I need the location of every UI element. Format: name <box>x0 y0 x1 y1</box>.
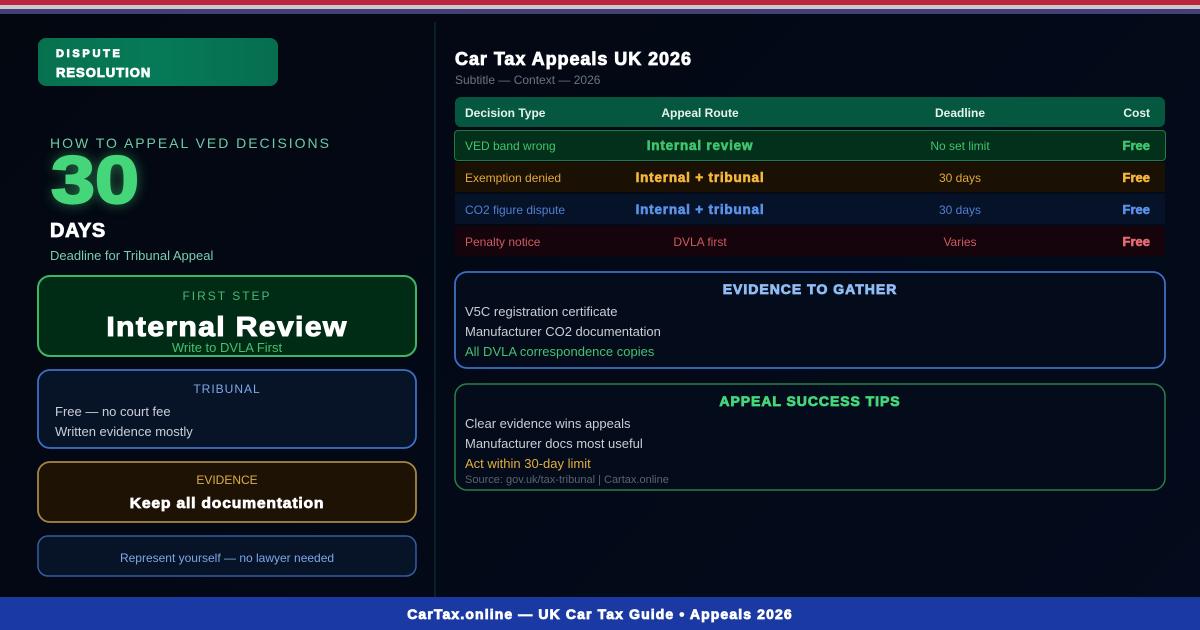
table header: Cost <box>1123 106 1150 120</box>
tips list: Act within 30-day limit <box>465 456 591 471</box>
tips list: Clear evidence wins appeals <box>465 416 630 431</box>
tribunal points: Written evidence mostly <box>55 424 193 439</box>
table header <box>455 97 1165 127</box>
evidence label: EVIDENCE <box>196 473 258 487</box>
table header: Decision Type <box>465 106 545 120</box>
card: first step <box>37 275 417 357</box>
evidence statement: Keep all documentation <box>130 495 324 512</box>
tribunal points <box>55 404 193 439</box>
card: representation note: Represent yourself — no lawyer needed <box>120 551 334 565</box>
row: CO2 figure dispute: CO2 figure dispute <box>465 203 565 217</box>
evidence list: All DVLA correspondence copies <box>465 344 654 359</box>
source: Source: gov.uk/tax-tribunal | Cartax.online <box>465 474 669 486</box>
flag stripe <box>0 0 1200 14</box>
tribunal points: Free — no court fee <box>55 404 171 419</box>
tribunal label: TRIBUNAL <box>193 382 261 396</box>
card: representation note <box>37 535 417 577</box>
hero number: 30 <box>51 143 139 218</box>
evidence heading: EVIDENCE TO GATHER <box>723 281 897 297</box>
row: penalty notice <box>455 226 1165 256</box>
row: VED band wrong: VED band wrong <box>465 139 556 153</box>
row: exemption denied: 30 days <box>939 171 981 185</box>
footer <box>0 597 1200 630</box>
row: CO2 figure dispute: 30 days <box>939 203 981 217</box>
first step label: FIRST STEP <box>182 289 272 303</box>
row: exemption denied: Internal + tribunal <box>636 170 764 185</box>
tips list: Manufacturer docs most useful <box>465 436 643 451</box>
evidence list: Manufacturer CO2 documentation <box>465 324 661 339</box>
row: exemption denied: Free <box>1123 170 1150 185</box>
hero caption: Deadline for Tribunal Appeal <box>50 248 213 263</box>
footer: CarTax.online — UK Car Tax Guide • Appeals 2026 <box>407 606 793 622</box>
evidence list: V5C registration certificate <box>465 304 617 319</box>
table header: Appeal Route <box>661 106 739 120</box>
row: exemption denied <box>455 162 1165 192</box>
table header: Deadline <box>935 106 985 120</box>
row: VED band wrong: No set limit <box>930 139 990 153</box>
badge: dispute resolution: DISPUTE <box>56 48 123 60</box>
row: CO2 figure dispute: Free <box>1123 202 1150 217</box>
table <box>454 97 1166 256</box>
card: tribunal <box>37 369 417 449</box>
panel: appeal success tips <box>454 383 1166 491</box>
badge: dispute resolution <box>38 38 278 86</box>
row: VED band wrong <box>454 130 1166 161</box>
subtitle: Subtitle — Context — 2026 <box>455 73 600 87</box>
row: penalty notice: Varies <box>943 235 977 249</box>
row: penalty notice: DVLA first <box>673 235 727 249</box>
row: exemption denied: Exemption denied <box>465 171 561 185</box>
row: penalty notice: Penalty notice <box>465 235 540 249</box>
row: VED band wrong: Internal review <box>647 138 753 153</box>
left panel <box>38 38 331 263</box>
panel: evidence to gather <box>454 271 1166 369</box>
tips heading: APPEAL SUCCESS TIPS <box>719 393 901 409</box>
row: CO2 figure dispute: Internal + tribunal <box>636 202 764 217</box>
title: Car Tax Appeals UK 2026 <box>455 49 692 69</box>
panel divider <box>434 22 436 597</box>
first step title: Internal Review <box>106 311 348 342</box>
card: evidence <box>37 461 417 523</box>
first step note: Write to DVLA First <box>172 340 282 355</box>
row: VED band wrong: Free <box>1123 138 1150 153</box>
badge: dispute resolution: RESOLUTION <box>56 65 151 80</box>
row: CO2 figure dispute <box>455 194 1165 224</box>
hero kicker: HOW TO APPEAL VED DECISIONS <box>50 135 331 151</box>
tips list <box>465 416 643 471</box>
row: penalty notice: Free <box>1123 234 1150 249</box>
evidence list <box>465 304 661 359</box>
hero unit: DAYS <box>50 220 106 242</box>
